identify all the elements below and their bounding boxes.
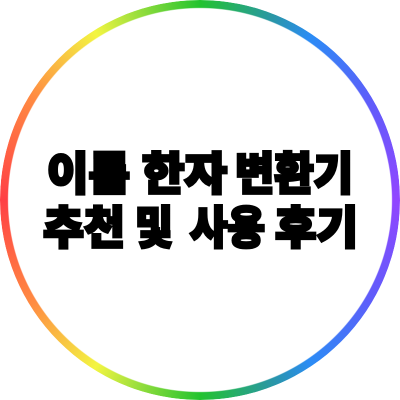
title line 1: 변환기 [235, 148, 353, 200]
title line 1 [47, 148, 353, 200]
title line 1: 한자 [142, 148, 227, 200]
title line 2 [43, 202, 358, 254]
title line 2: 사용 [190, 202, 265, 254]
title line 2: 및 [135, 202, 173, 254]
title line 2: 추천 [43, 202, 125, 254]
title line 2: 후기 [275, 202, 358, 254]
title line 1: 이름 [47, 148, 130, 200]
